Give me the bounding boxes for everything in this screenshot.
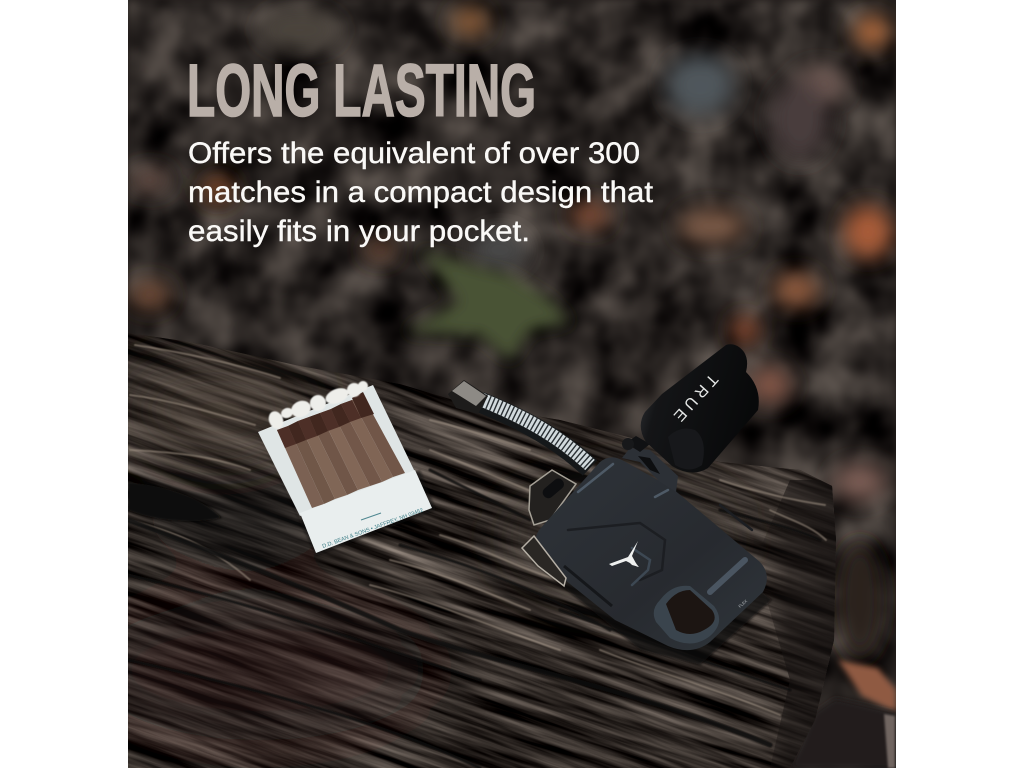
description text: easily fits in your pocket. bbox=[188, 215, 530, 248]
light grain streaks bbox=[128, 345, 826, 715]
nozzle tip bbox=[448, 380, 488, 414]
flexible spring neck bbox=[480, 399, 590, 468]
cap brand text: TRUE bbox=[667, 370, 721, 427]
pale stone at lower right bbox=[884, 714, 895, 768]
product photo bbox=[128, 0, 896, 768]
clip bbox=[522, 536, 566, 586]
description text bbox=[188, 137, 654, 248]
hinge bbox=[622, 448, 678, 492]
log end face bbox=[761, 480, 836, 768]
match sticks bbox=[277, 396, 405, 508]
contact shadow bbox=[530, 560, 772, 665]
matchbook bbox=[258, 379, 436, 556]
back card bbox=[258, 385, 415, 516]
lighter bbox=[448, 380, 772, 665]
model mark: FLEX bbox=[737, 598, 748, 609]
body ridges bbox=[568, 464, 752, 592]
description text: matches in a compact design that bbox=[188, 176, 654, 209]
wooden log bbox=[90, 330, 848, 768]
front flap bbox=[300, 470, 432, 553]
knot hollow bbox=[128, 482, 222, 521]
out of focus green leaf bbox=[405, 250, 570, 360]
white match tips bbox=[266, 379, 370, 431]
orange leaf lower right bbox=[838, 660, 896, 712]
wood grain texture bbox=[477, 550, 489, 563]
match heads bbox=[277, 392, 374, 448]
blurred forest floor background bbox=[128, 0, 896, 768]
dark grain cracks bbox=[128, 470, 820, 768]
description text: Offers the equivalent of over 300 bbox=[188, 137, 640, 170]
brand logo bbox=[609, 541, 639, 567]
lighter cap bbox=[622, 344, 759, 473]
hole at base bbox=[654, 586, 719, 644]
body bbox=[535, 457, 767, 650]
heading: LONG LASTING bbox=[187, 49, 536, 132]
book shadow bbox=[258, 434, 436, 556]
striker mark bbox=[361, 513, 381, 520]
background log lower right bbox=[790, 698, 896, 768]
charging port bbox=[529, 470, 576, 525]
maker text: D.D. BEAN & SONS • JAFFREY, NH 03452 bbox=[322, 508, 424, 550]
log tone zones bbox=[90, 370, 730, 740]
infographic canvas bbox=[128, 0, 896, 768]
